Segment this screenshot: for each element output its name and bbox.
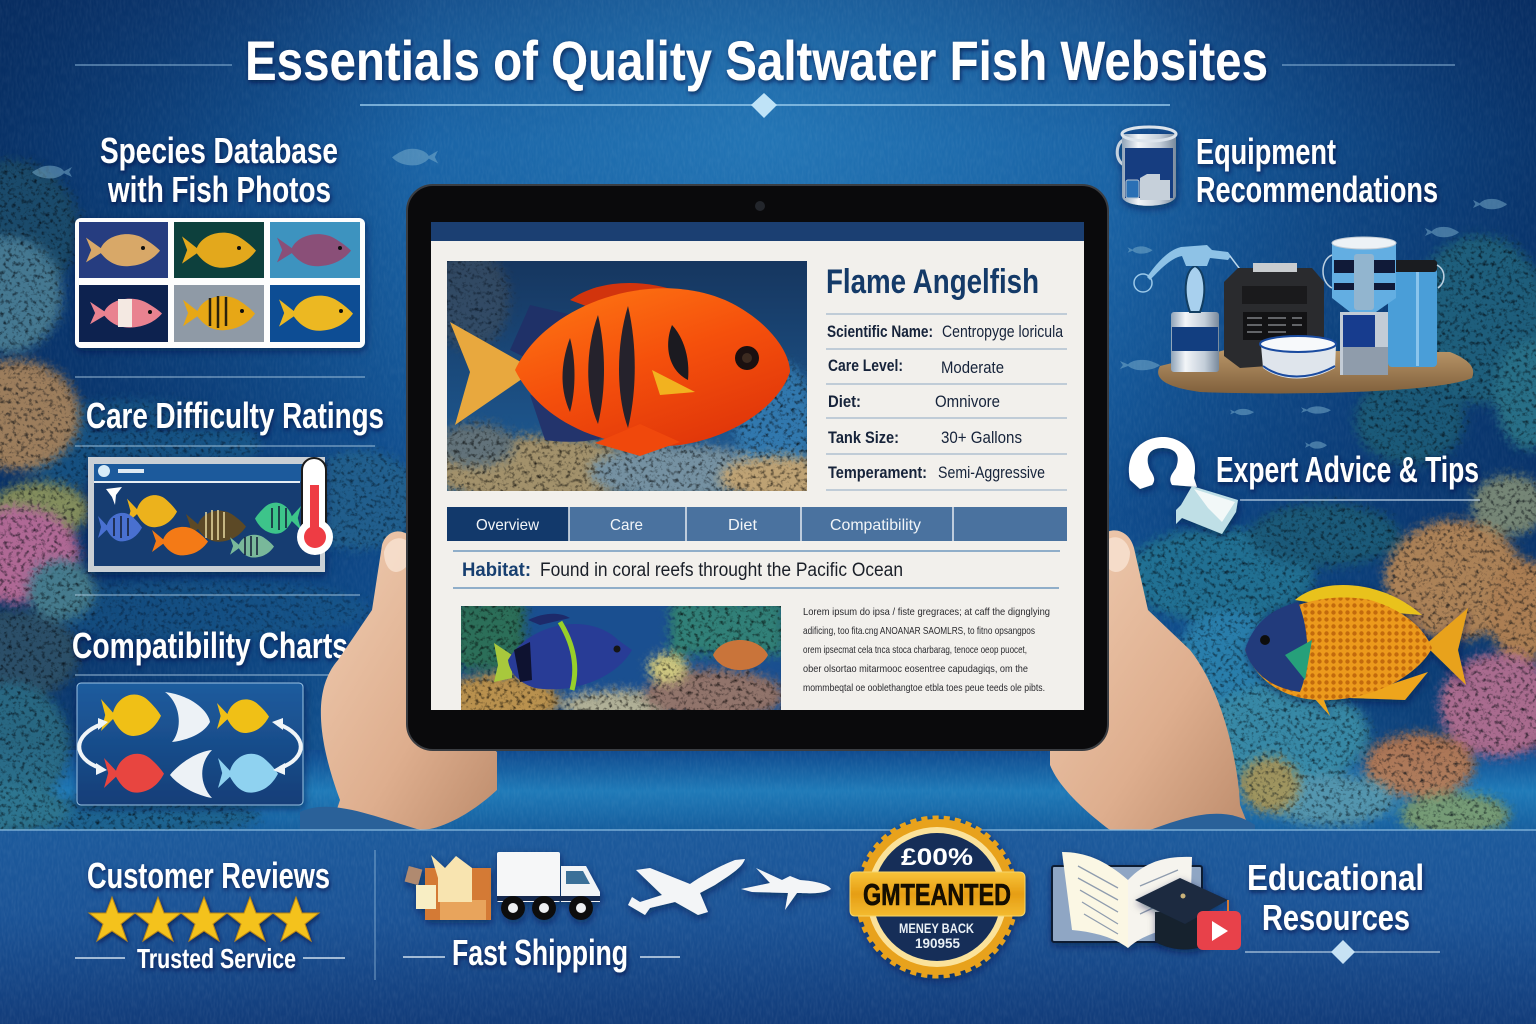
heading: equipment recommendations: Equipment xyxy=(1196,131,1336,172)
guarantee badge: MENEY BACK xyxy=(899,920,974,936)
heading: equipment recommendations xyxy=(1196,131,1438,210)
icon: open book xyxy=(1052,852,1202,948)
black box xyxy=(1224,263,1324,368)
fact rows: Diet: xyxy=(828,392,861,411)
left hand xyxy=(300,531,497,830)
divider lines left xyxy=(75,377,375,675)
heading: equipment recommendations: Recommendations xyxy=(1196,169,1438,210)
heading: species database: Species Database xyxy=(100,130,338,171)
guarantee badge: £00% xyxy=(901,844,973,871)
tab bar xyxy=(447,507,1067,541)
blue tank xyxy=(1388,260,1444,367)
title xyxy=(75,29,1455,118)
pump xyxy=(1134,245,1253,372)
panel: compatibility chart xyxy=(77,683,303,805)
icon: plane two xyxy=(741,868,831,910)
guarantee badge: GMTEANTED xyxy=(863,877,1011,912)
heading: compatibility charts: Compatibility Charts xyxy=(72,625,348,666)
icon: boxes xyxy=(405,855,491,920)
customer reviews: Trusted Service xyxy=(137,943,296,974)
heading: care difficulty ratings: Care Difficulty Ratings xyxy=(86,395,384,436)
left coral reef xyxy=(0,160,420,835)
big orange fish xyxy=(1245,585,1468,716)
right coral reef xyxy=(1125,235,1536,837)
lorem text: orem ipsecmat cela tnca stoca charbarag, tenoce oeop puocet, xyxy=(803,644,1027,656)
guarantee badge xyxy=(850,819,1025,975)
white tub xyxy=(1260,336,1336,378)
tab bar: Diet xyxy=(728,517,758,534)
habitat line: Found in coral reefs throught the Pacific Ocean xyxy=(540,560,903,581)
heading: species database xyxy=(100,130,338,210)
title: Essentials of Quality Saltwater Fish Websites xyxy=(245,29,1268,92)
tab bar: Compatibility xyxy=(830,517,921,534)
lorem text xyxy=(803,606,1050,694)
icon: video play xyxy=(1197,911,1241,950)
lorem text: Lorem ipsum do ipsa / fiste gregraces; at caff the dignglying xyxy=(803,606,1050,618)
background small fish xyxy=(32,149,1507,449)
lorem text: ober olsortao mitarmooc eosentree capudagiqs, om the xyxy=(803,663,1028,675)
icon: canister xyxy=(1117,127,1176,206)
tab bar: Overview xyxy=(476,517,539,534)
fact rows: Temperament: xyxy=(828,463,927,482)
fact rows: Scientific Name: xyxy=(827,322,933,341)
fact rows: 30+ Gallons xyxy=(941,428,1022,447)
panel: species photo grid xyxy=(75,218,365,348)
fact rows: Care Level: xyxy=(828,356,903,375)
habitat line xyxy=(453,551,1060,588)
fact rows: Tank Size: xyxy=(828,428,899,447)
filter unit xyxy=(1323,237,1396,375)
fact rows xyxy=(826,314,1067,490)
fast shipping label: Fast Shipping xyxy=(452,932,628,973)
photo: reef fish xyxy=(461,606,781,710)
guarantee badge: 190955 xyxy=(915,935,960,951)
customer reviews xyxy=(75,855,345,974)
icon: envelope bubble xyxy=(1176,486,1238,534)
fact rows: Centropyge loricula xyxy=(942,322,1063,341)
star rating xyxy=(89,897,319,941)
fish name: Flame Angelfish xyxy=(826,263,1039,301)
customer reviews: Customer Reviews xyxy=(87,855,330,896)
equipment shelf group xyxy=(1134,237,1473,393)
tablet xyxy=(407,185,1108,750)
icon: truck xyxy=(497,852,600,920)
panel: care difficulty screen xyxy=(88,457,325,572)
bottom band xyxy=(0,829,1536,1024)
lorem text: mommbeqtal oe ooblethangtoe etbla toes peue teeds ole pibts. xyxy=(803,682,1045,694)
icon: thermometer xyxy=(297,458,333,555)
educational resources: Educational xyxy=(1247,857,1424,898)
educational resources: Resources xyxy=(1262,897,1410,938)
fact rows: Omnivore xyxy=(935,392,1000,411)
icon: expert bubble xyxy=(1129,437,1197,489)
icon: plane one xyxy=(628,859,745,915)
heading: species database: with Fish Photos xyxy=(107,169,331,210)
right hand xyxy=(1050,530,1255,830)
fact rows: Moderate xyxy=(941,358,1004,377)
icon: graduation cap xyxy=(1135,878,1228,950)
lorem text: adificing, too fita.cng ANOANAR SAOMLRS, to fitno opsangpos xyxy=(803,625,1035,637)
tab bar: Care xyxy=(610,517,643,534)
educational resources xyxy=(1245,857,1440,964)
tablet screen xyxy=(430,222,1084,726)
habitat line: Habitat: xyxy=(462,560,531,581)
wood shelf xyxy=(1158,350,1473,393)
fact rows: Semi-Aggressive xyxy=(938,463,1045,482)
photo: flame angelfish xyxy=(447,261,807,491)
